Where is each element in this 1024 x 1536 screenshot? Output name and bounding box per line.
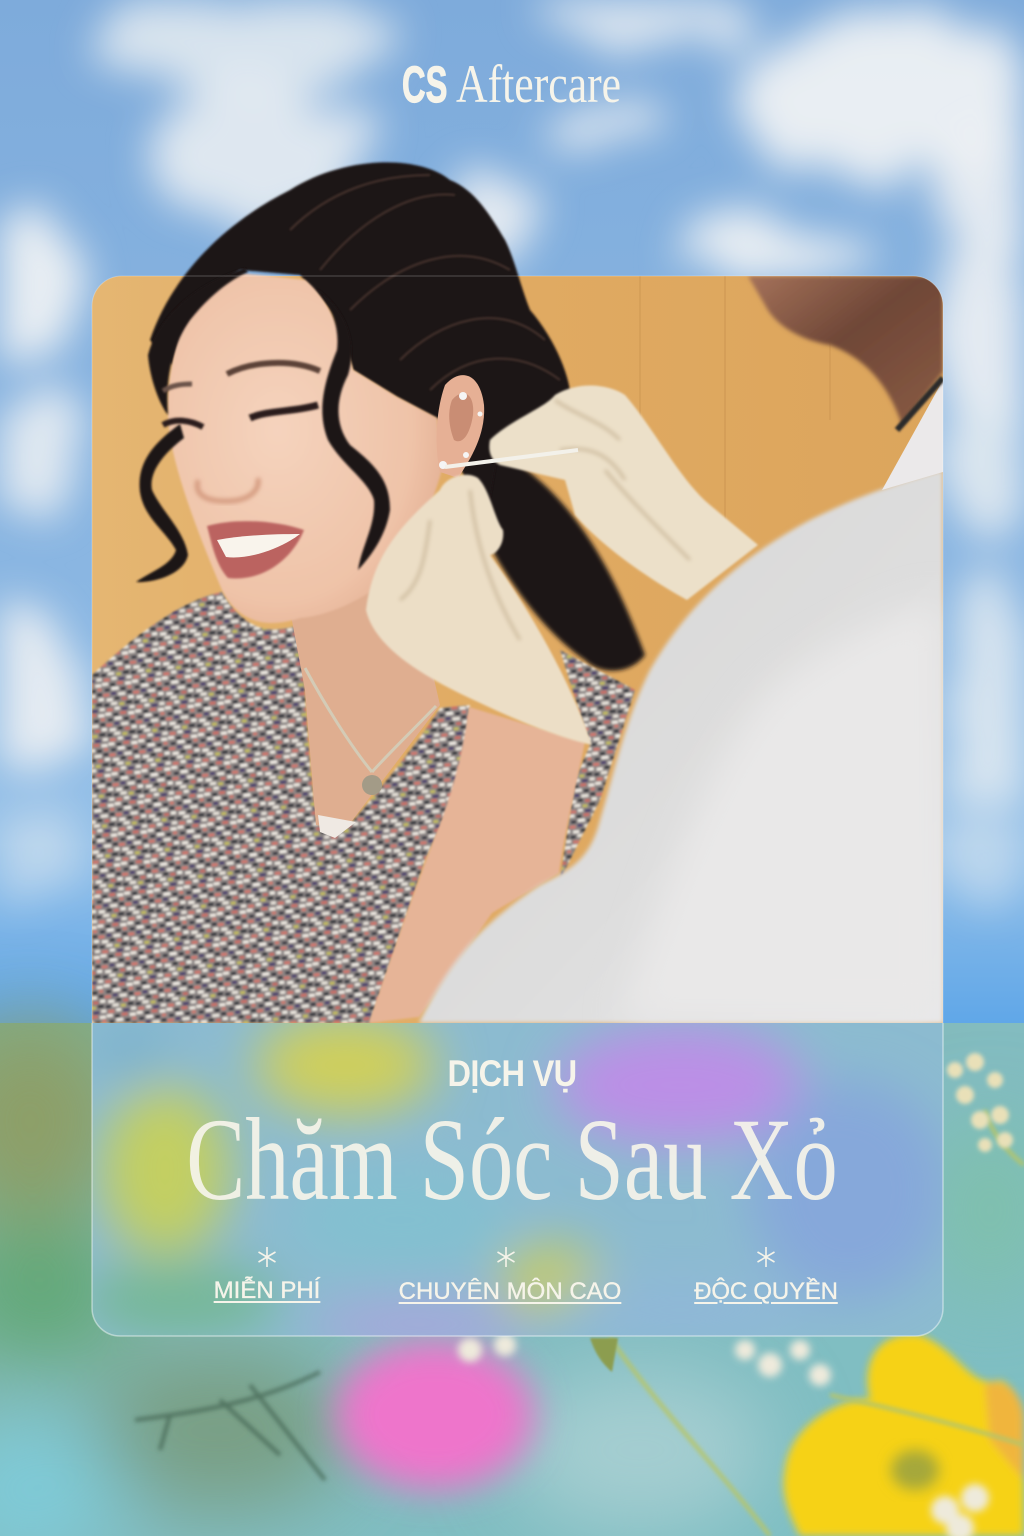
right glove finger folds	[555, 400, 690, 560]
label: CHUYÊN MÔN CAO	[399, 1278, 621, 1305]
eyes and eyebrows	[163, 363, 320, 427]
back hair	[488, 462, 648, 674]
earrings	[439, 392, 482, 469]
logo wordmark: Aftercare	[456, 54, 621, 114]
logo mark: CS	[402, 56, 447, 113]
tag: exclusive	[694, 1247, 838, 1305]
label: ĐỘC QUYỀN	[694, 1278, 838, 1305]
collar strap	[897, 378, 943, 430]
flower meadow background	[0, 1020, 1024, 1536]
left glove folds	[400, 490, 520, 640]
tweed jacket	[92, 592, 470, 1023]
sky background	[0, 0, 1024, 1030]
hair highlights	[290, 175, 560, 390]
panel edge	[92, 276, 943, 1023]
teeth	[217, 534, 300, 557]
woman's hair	[150, 162, 571, 500]
coat collar	[882, 380, 943, 490]
white coat doctor	[419, 470, 943, 1023]
star icon	[757, 1247, 775, 1267]
white undershirt	[318, 815, 356, 838]
star icon	[258, 1247, 276, 1267]
kicker heading: DỊCH VỤ	[448, 1053, 576, 1094]
tag: expertise	[398, 1247, 622, 1305]
face	[168, 273, 442, 623]
nose shadow	[197, 478, 258, 501]
tag: free	[214, 1247, 320, 1304]
star icon	[497, 1247, 515, 1267]
right glove hand	[489, 386, 758, 600]
necklace	[305, 668, 436, 772]
left curl	[136, 424, 188, 582]
left bang	[148, 268, 248, 415]
main title: Chăm Sóc Sau Xỏ	[186, 1094, 838, 1225]
lips	[207, 521, 304, 578]
left glove hand	[366, 475, 592, 745]
doctor neck	[748, 276, 943, 425]
clouds	[0, 0, 1024, 905]
photo panel	[92, 162, 943, 1023]
cheek hair strand	[316, 288, 390, 570]
label: MIỄN PHÍ	[214, 1277, 320, 1304]
forearm	[369, 707, 585, 1023]
neck and chest	[292, 592, 440, 826]
cotton swab	[445, 450, 578, 467]
tweed right side	[560, 650, 635, 880]
pendant	[362, 775, 382, 795]
logo	[402, 54, 621, 114]
glass panel colours	[80, 1015, 950, 1350]
ear	[437, 375, 484, 478]
